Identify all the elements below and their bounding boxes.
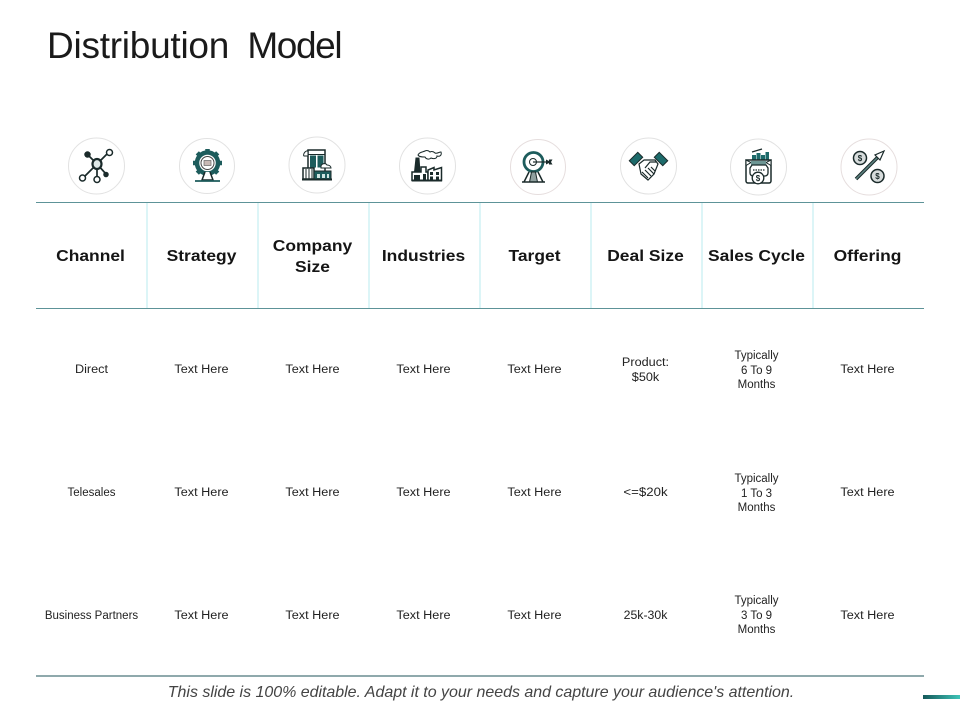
row 3: Text Here — [840, 610, 895, 622]
row 2: Text Here — [174, 487, 229, 499]
row 3: Months — [738, 624, 775, 636]
header: Company Size — [273, 238, 352, 276]
row 1: Text Here — [285, 364, 340, 376]
row 3: Business Partners — [45, 610, 138, 622]
row 3: 25k-30k — [624, 610, 667, 622]
row 2: Text Here — [840, 487, 895, 499]
table bottom rule — [36, 675, 924, 677]
icon: target — [510, 140, 566, 194]
icon: sales cycle: $ — [756, 174, 761, 183]
icon: company building — [289, 137, 345, 193]
row 1: Text Here — [396, 364, 451, 376]
icon: gear — [180, 138, 234, 194]
row 3: Typically — [734, 595, 779, 607]
icon row — [68, 136, 898, 196]
header: Sales Cycle: Sales Cycle — [708, 248, 805, 265]
row 3: 3 To 9 — [741, 610, 772, 622]
icon: offering growth — [841, 139, 897, 195]
row 1: Direct — [75, 364, 108, 376]
header: Company Size: Size — [295, 259, 330, 276]
row 1: Product: — [622, 357, 669, 369]
row 3: Text Here — [507, 610, 562, 622]
footer note: This slide is 100% editable. Adapt it to your needs and capture your audience's attention. — [168, 684, 794, 701]
row 2: Months — [738, 502, 775, 514]
row 2: 1 To 3 — [741, 488, 772, 500]
title: Distribution Model — [47, 25, 341, 66]
row 3 — [45, 595, 895, 636]
row 1: Months — [738, 379, 775, 391]
icon: handshake — [620, 138, 676, 194]
row 1: $50k — [632, 372, 659, 384]
row 2: Text Here — [285, 487, 340, 499]
icon: offering growth: $ — [875, 172, 880, 181]
row 2 — [68, 473, 895, 514]
column separator — [590, 203, 592, 308]
row 2: <=$20k — [623, 487, 668, 499]
row 1 — [75, 350, 895, 391]
row 2: Typically — [734, 473, 779, 485]
row 1: Typically — [734, 350, 779, 362]
row 1: 6 To 9 — [741, 364, 772, 376]
column separator — [368, 203, 370, 308]
header: Offering: Offering — [834, 248, 901, 265]
icon: sales cycle — [730, 139, 786, 195]
icon: factory — [400, 138, 456, 194]
accent bar — [923, 695, 960, 699]
column separator — [479, 203, 481, 308]
column separator — [146, 203, 148, 308]
row 3: Text Here — [285, 610, 340, 622]
row 2: Telesales — [68, 487, 115, 499]
row 1: Text Here — [840, 364, 895, 376]
row 3: Text Here — [174, 610, 229, 622]
icon: offering growth: $ — [858, 154, 863, 163]
header top rule — [36, 202, 924, 203]
header: Channel: Channel — [56, 248, 125, 265]
column separator — [257, 203, 259, 308]
column separator — [701, 203, 703, 308]
header: Company Size: Company — [273, 238, 352, 255]
row 1: Text Here — [507, 364, 562, 376]
column separator — [812, 203, 814, 308]
header: Deal Size: Deal Size — [607, 248, 684, 265]
header bottom rule — [36, 308, 924, 309]
header: Industries: Industries — [382, 248, 465, 265]
row 2: Text Here — [507, 487, 562, 499]
row 2: Text Here — [396, 487, 451, 499]
row 1: Text Here — [174, 364, 229, 376]
row 3: Text Here — [396, 610, 451, 622]
header: Target: Target — [508, 248, 561, 265]
header: Strategy: Strategy — [167, 248, 236, 265]
icon: network — [68, 138, 124, 194]
